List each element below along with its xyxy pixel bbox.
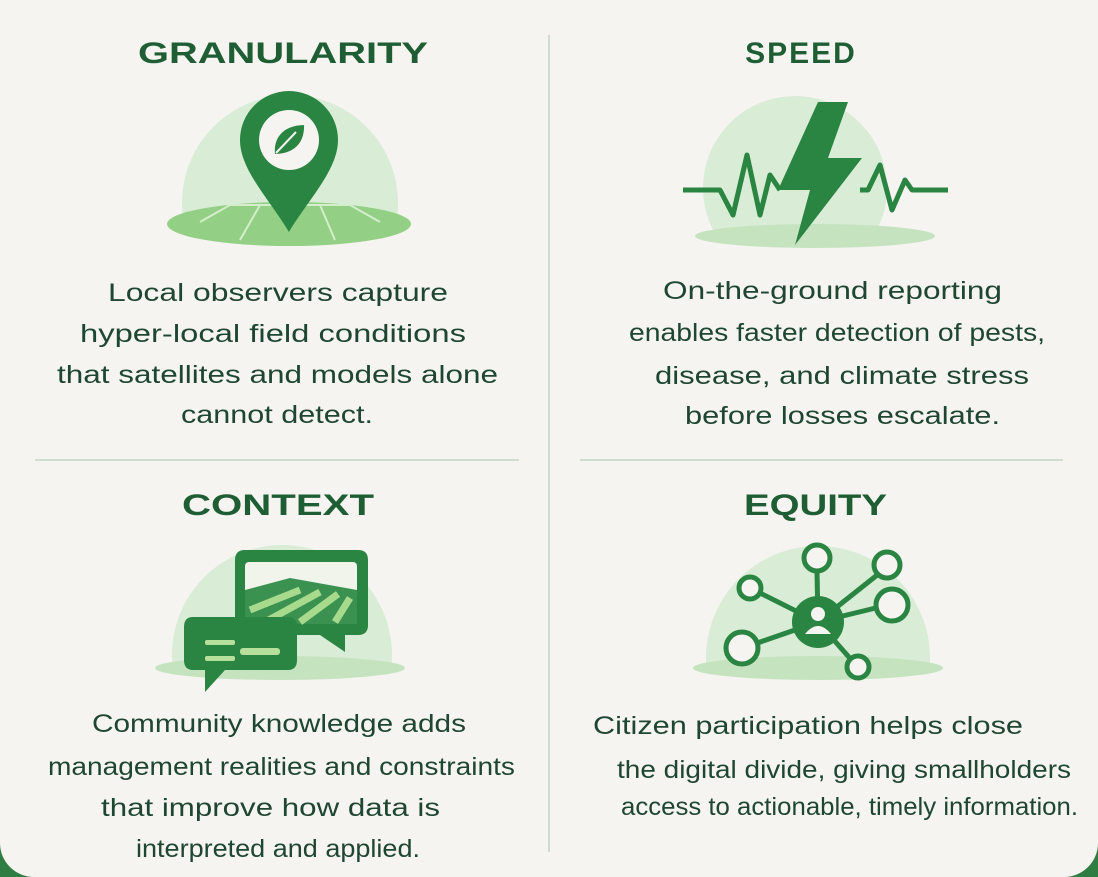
text: speed: disease, and climate stress (655, 362, 1029, 390)
text: speed: enables faster detection of pests, (629, 319, 1045, 347)
text: granularity: that satellites and models alone (57, 361, 498, 389)
heading: speed: SPEED (745, 37, 857, 70)
text: context: Community knowledge adds (92, 710, 466, 738)
text: context: management realities and constraints (48, 753, 515, 781)
icon: speech bubbles with field (155, 545, 405, 692)
text: equity: access to actionable, timely information. (621, 793, 1078, 821)
heading: granularity: GRANULARITY (138, 37, 428, 70)
text: equity: the digital divide, giving smallholders (617, 756, 1071, 784)
panel: granularity (57, 37, 498, 429)
text: granularity: hyper-local field conditions (80, 320, 466, 348)
heading: equity: EQUITY (744, 489, 887, 522)
text: context (48, 710, 515, 863)
icon: lightning pulse (683, 96, 948, 248)
text: speed: On-the-ground reporting (663, 277, 1002, 305)
text: context: that improve how data is (101, 794, 440, 822)
text: speed: before losses escalate. (685, 402, 1000, 430)
text: granularity (57, 279, 498, 429)
icon: network (693, 542, 943, 680)
text: equity (593, 712, 1078, 821)
text: speed (629, 277, 1045, 430)
text: context: interpreted and applied. (136, 835, 420, 863)
text: granularity: cannot detect. (181, 401, 373, 429)
panel: speed (629, 37, 1045, 430)
panel: equity (593, 489, 1078, 821)
panel: context (48, 489, 515, 863)
text: equity: Citizen participation helps close (593, 712, 1023, 740)
icon: map pin with leaf (167, 91, 411, 246)
text: granularity: Local observers capture (108, 279, 448, 307)
heading: context: CONTEXT (182, 489, 374, 522)
